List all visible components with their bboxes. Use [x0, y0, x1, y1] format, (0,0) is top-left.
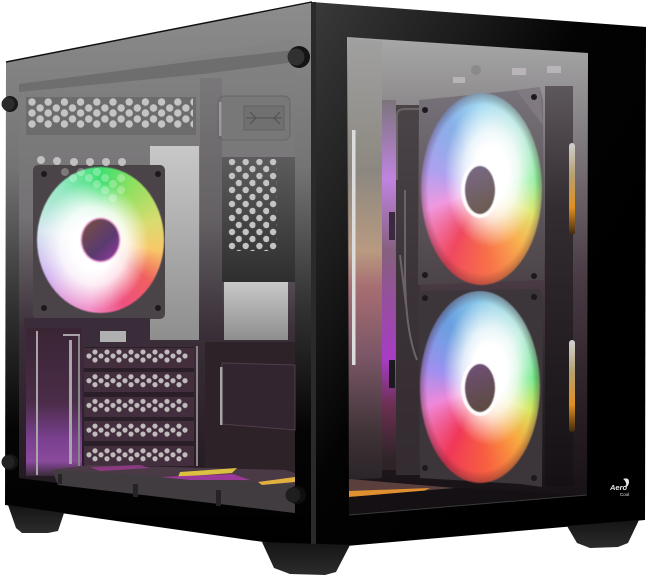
- fan hub: [465, 364, 495, 412]
- bottom fans: [52, 465, 295, 513]
- top hex vents: [26, 97, 196, 135]
- violet glow column: [382, 100, 396, 470]
- fan: left: [37, 167, 164, 313]
- drive cage: [218, 96, 290, 140]
- side hex panel: [222, 157, 295, 282]
- right side frame: [312, 2, 646, 549]
- standoff: bottom left: [2, 454, 18, 470]
- right window: [347, 37, 588, 515]
- slot bracket bar: [100, 331, 126, 342]
- right fan housing rear: [545, 86, 573, 486]
- lower backplate block: [224, 282, 288, 340]
- area below left fan: [24, 318, 150, 348]
- light strip upper: [569, 143, 575, 235]
- top edge line: [6, 2, 312, 62]
- left glass panel: [5, 3, 312, 549]
- light strip lower: [569, 340, 575, 432]
- standoff: top right: [288, 46, 310, 68]
- lower left lines: [36, 331, 80, 475]
- lower right compartment: [205, 342, 295, 472]
- fan frame: upper right: [418, 87, 544, 285]
- fan hub: [82, 219, 119, 261]
- expansion slots: [84, 346, 198, 472]
- logo: Cool: [620, 492, 629, 497]
- top pieces: [453, 65, 561, 83]
- grille row above left fan: [37, 156, 126, 166]
- logo: [609, 478, 629, 497]
- fan: lower right: [420, 291, 540, 483]
- fan corner screws: [41, 94, 537, 481]
- standoff: top left: [2, 96, 18, 112]
- left interior: [19, 38, 295, 513]
- fan frame: lower right: [418, 289, 543, 487]
- fan: upper right: [421, 93, 542, 285]
- standoff: bottom right: [286, 486, 306, 504]
- cable channel: [389, 105, 420, 475]
- white vertical light: [352, 130, 356, 365]
- fan frame: left: [33, 165, 165, 319]
- central column: [200, 78, 222, 378]
- upper shelf: [19, 50, 295, 92]
- corner pillar: [311, 2, 316, 549]
- fan grille holes over left fan: [61, 168, 125, 202]
- right window pillar: [348, 38, 382, 480]
- lower left purple panel: [26, 328, 82, 476]
- fan hub: [465, 166, 495, 214]
- white backplate block: [150, 146, 199, 340]
- bottom edge highlight: [349, 495, 587, 515]
- floor fan strip in window: [349, 479, 587, 515]
- feet: [8, 505, 639, 575]
- logo: Aero: [609, 483, 628, 492]
